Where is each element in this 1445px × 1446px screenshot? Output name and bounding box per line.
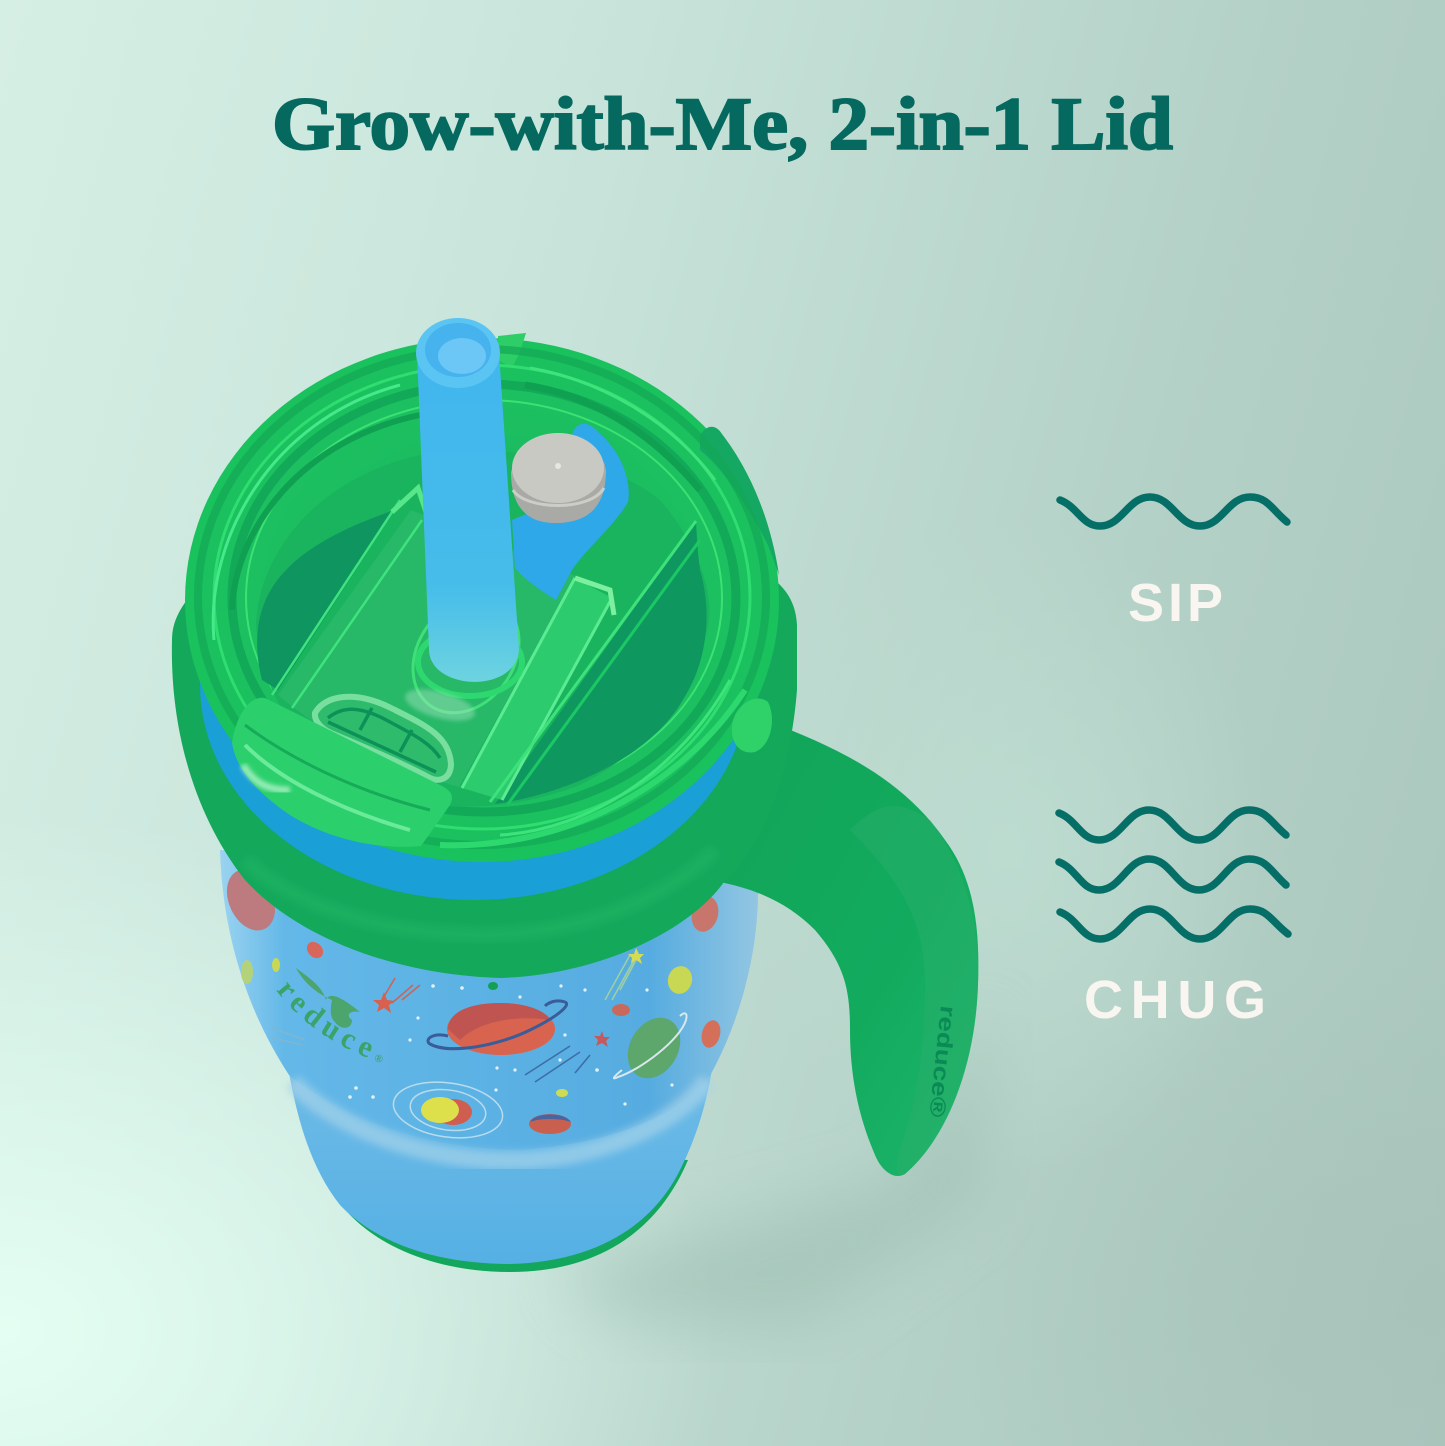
blue inner sleeve	[200, 470, 748, 900]
grey valve top	[512, 433, 604, 503]
dark well left	[257, 510, 395, 690]
cast shadow	[560, 1000, 990, 1330]
straw opening	[425, 323, 491, 377]
cup body	[220, 850, 758, 1272]
blue stopper arm	[512, 424, 629, 600]
print: space pattern	[226, 870, 720, 1139]
product: tumbler with 2-in-1 lid	[172, 318, 978, 1272]
shooting stars	[272, 955, 636, 1082]
lid inner dish	[256, 451, 709, 807]
straw socket	[391, 577, 541, 733]
handle	[718, 722, 978, 1176]
grey valve side	[511, 462, 606, 523]
ringed green planet	[614, 1008, 691, 1088]
handle side face	[850, 806, 978, 1175]
white speckles	[348, 984, 674, 1106]
upper printed body	[220, 850, 758, 1150]
striped planet	[529, 1114, 571, 1134]
icon: CHUG waves	[1059, 810, 1288, 939]
top tab	[498, 333, 526, 368]
side hinge	[732, 699, 772, 753]
straw tube	[417, 352, 519, 682]
collar top highlight	[245, 850, 715, 935]
handle body	[718, 722, 978, 1176]
label: SIP wave	[1060, 497, 1287, 526]
grey valve with blue arm	[511, 424, 629, 600]
vent window	[315, 697, 451, 780]
label: SIP: SIP	[1128, 573, 1223, 633]
socket glare	[402, 683, 478, 727]
ringed red planet	[428, 1001, 567, 1055]
lid rim	[185, 338, 779, 862]
dark well right	[495, 521, 707, 804]
small planets	[218, 862, 723, 1097]
stars	[373, 948, 644, 1047]
right tab	[700, 427, 779, 575]
brand wordmark: reduce®	[276, 982, 382, 1062]
title: Grow-with-Me, 2-in-1 Lid	[272, 83, 1173, 166]
straw	[416, 318, 519, 682]
central slider strip	[278, 510, 576, 787]
lid	[185, 333, 779, 862]
base ring	[332, 1150, 688, 1272]
lid concentric rings	[198, 349, 766, 845]
straw top lip	[416, 318, 500, 388]
flip bumper	[232, 698, 452, 847]
handle embossed wordmark: reduce®	[924, 1004, 961, 1118]
logo mark	[296, 968, 360, 1028]
slider rails	[272, 488, 700, 804]
label: CHUG: CHUG	[1084, 970, 1266, 1030]
silicone collar	[172, 578, 797, 978]
translucent slider bar	[462, 578, 612, 800]
valve ridge	[513, 488, 604, 506]
lower body	[289, 1050, 712, 1264]
frosted transition band	[292, 1080, 708, 1161]
orbit planet	[390, 1076, 506, 1144]
